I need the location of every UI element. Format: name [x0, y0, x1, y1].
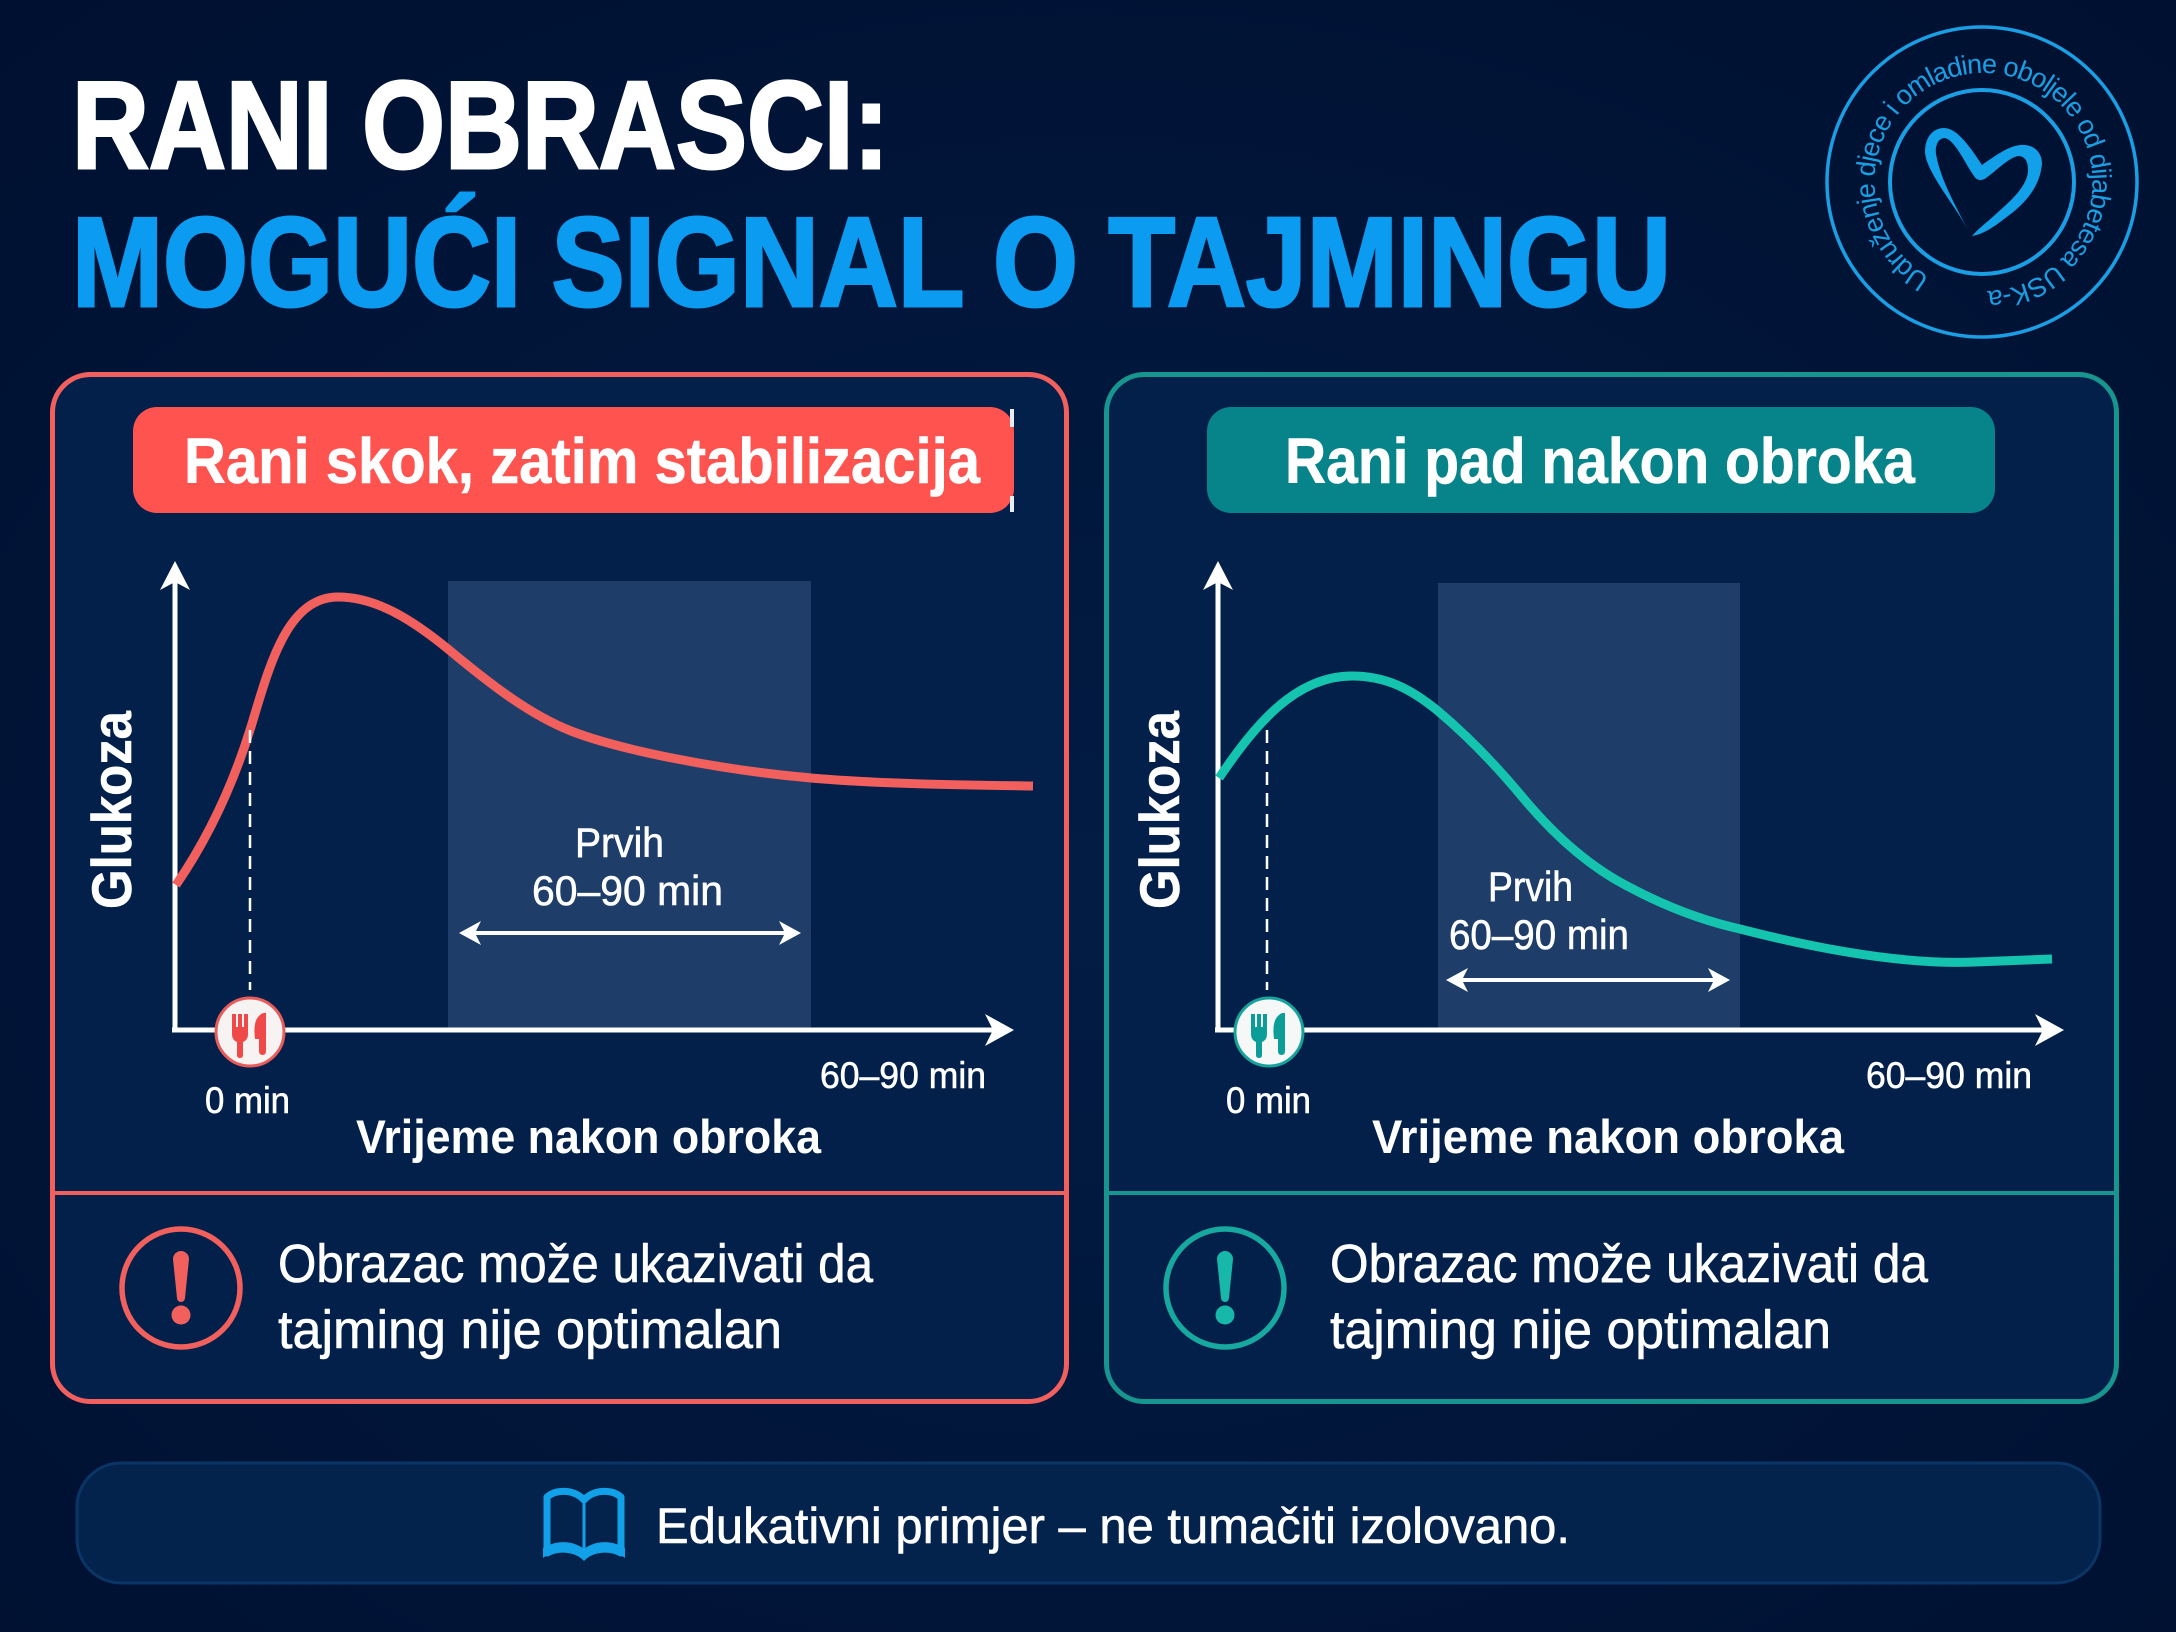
highlighted window band: [448, 581, 811, 1030]
time labels: 60–90 min: [820, 1055, 986, 1096]
title: MOGUĆI SIGNAL O TAJMINGU: [72, 191, 1671, 333]
panel: early spike: [52, 374, 1067, 1402]
heading pill: Rani pad nakon obroka: [1285, 425, 1915, 497]
icon: meal: [1235, 998, 1303, 1066]
logo badge: Udruženje djece i omladine oboljele od dijabetesa USK-a: [1856, 55, 2112, 306]
time labels: 60–90 min: [1866, 1055, 2032, 1096]
window label: 60–90 min: [532, 867, 723, 914]
x axis arrowhead: [2035, 1014, 2064, 1046]
heading pill: Rani skok, zatim stabilizacija: [184, 425, 980, 497]
icon: meal: [216, 998, 284, 1066]
glucose curve: [1219, 676, 2052, 962]
y axis arrowhead: [160, 561, 190, 590]
x axis label: Vrijeme nakon obroka: [1372, 1110, 1845, 1163]
window arrow: [470, 931, 790, 935]
x axis: [1215, 1028, 2050, 1032]
footer text: Edukativni primjer – ne tumačiti izolovano.: [656, 1498, 1570, 1554]
divider: [52, 1191, 1067, 1195]
window label: 60–90 min: [1449, 911, 1629, 958]
y axis arrowhead: [1203, 561, 1233, 590]
glucose curve: [176, 597, 1033, 885]
title: RANI OBRASCI:: [72, 57, 889, 195]
title: [72, 57, 1671, 333]
takeaway text: Obrazac može ukazivati da: [278, 1234, 874, 1294]
panel: early drop: [1106, 374, 2117, 1402]
y axis: [1216, 575, 1220, 1030]
icon: warning: [1166, 1229, 1284, 1347]
takeaway text: tajming nije optimalan: [1330, 1300, 1831, 1360]
highlighted window band: [1438, 583, 1740, 1030]
x axis arrowhead: [985, 1014, 1014, 1046]
divider: [1106, 1191, 2117, 1195]
y axis label: Glukoza: [80, 710, 143, 909]
takeaway text: [1330, 1234, 1929, 1360]
icon: open book: [543, 1491, 625, 1561]
heading pill: [1207, 407, 1995, 513]
window arrow: [1457, 978, 1719, 982]
icon: warning: [122, 1229, 240, 1347]
time labels: [205, 1055, 986, 1121]
window label: [1449, 863, 1629, 958]
takeaway text: [278, 1234, 874, 1360]
footer note: [77, 1463, 2100, 1583]
takeaway text: Obrazac može ukazivati da: [1330, 1234, 1929, 1294]
x axis label: Vrijeme nakon obroka: [356, 1110, 822, 1163]
dashed line at meal: [1266, 730, 1268, 990]
time labels: [1226, 1055, 2032, 1121]
y axis: [172, 575, 178, 1030]
x axis: [172, 1028, 1000, 1032]
time labels: 0 min: [205, 1080, 290, 1121]
window label: [532, 819, 723, 914]
time labels: 0 min: [1226, 1080, 1311, 1121]
dashed line at meal: [249, 730, 251, 990]
takeaway text: tajming nije optimalan: [278, 1300, 782, 1360]
window arrowheads: [459, 921, 801, 945]
heading pill: [133, 407, 1014, 513]
y axis label: Glukoza: [1128, 710, 1191, 909]
window arrowheads: [1446, 968, 1730, 992]
window label: Prvih: [575, 819, 664, 866]
window label: Prvih: [1488, 863, 1573, 910]
